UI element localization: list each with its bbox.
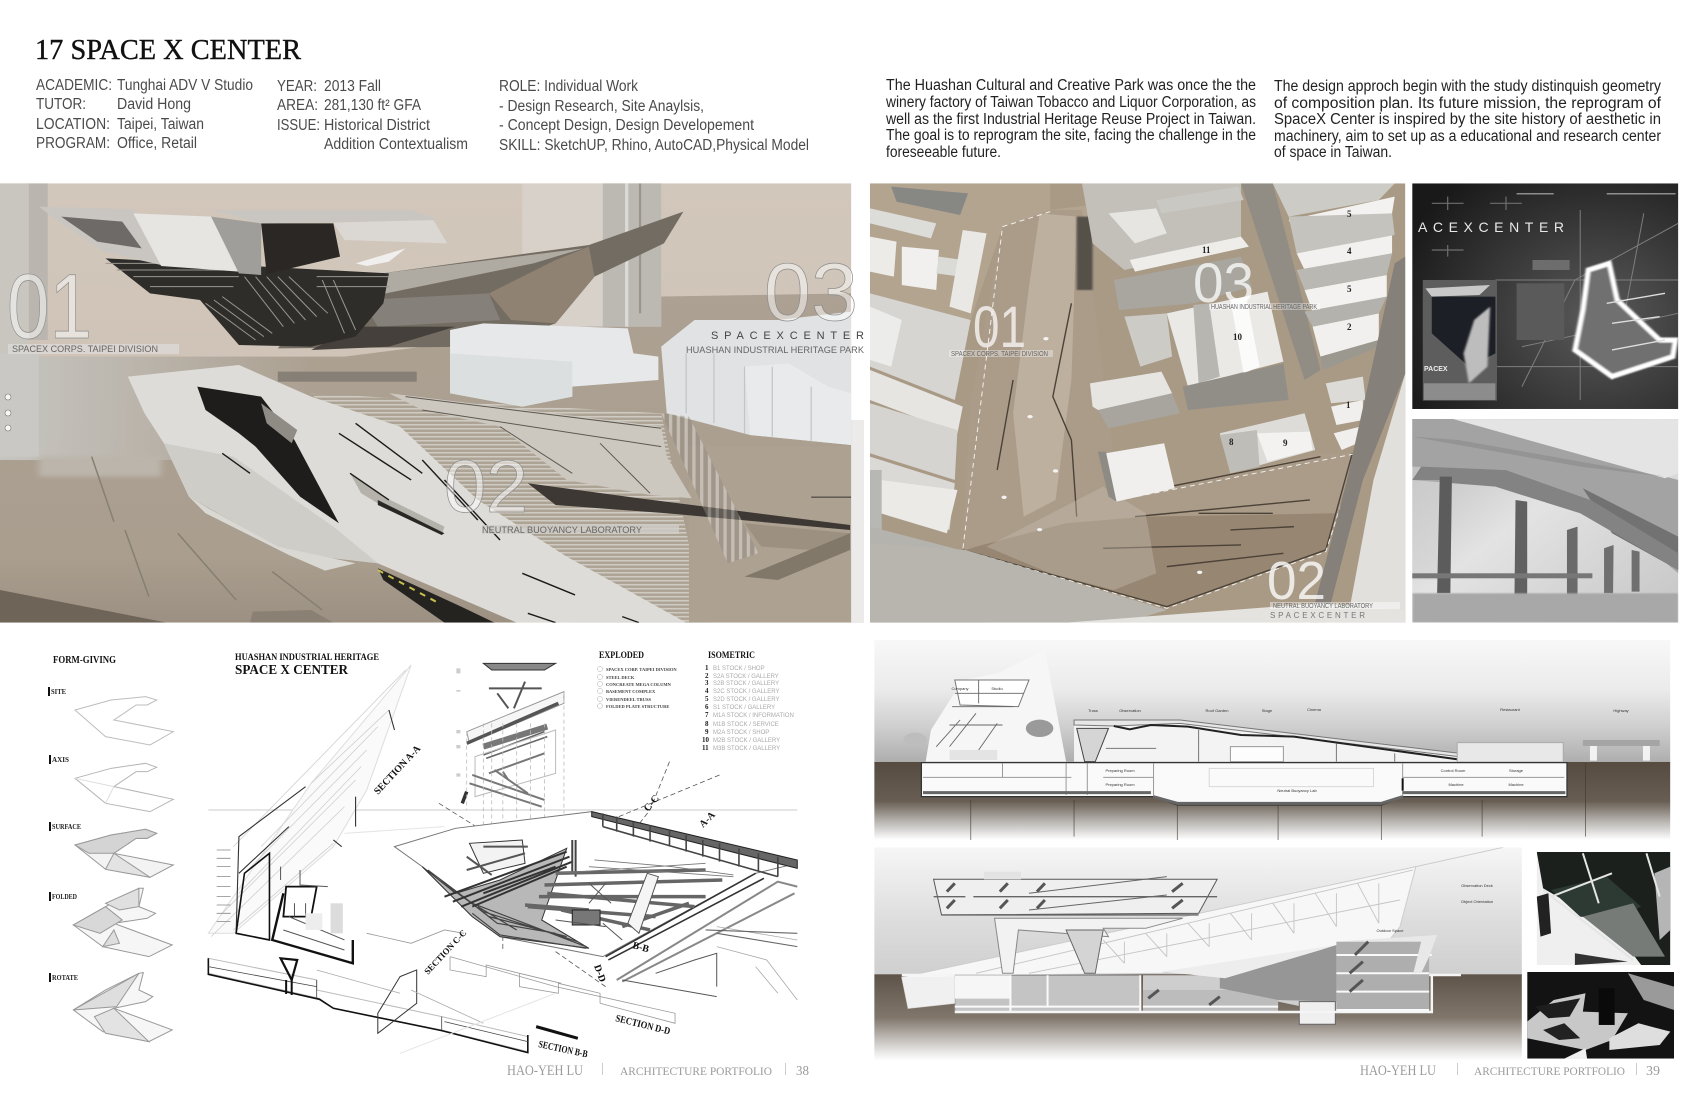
exploded legend: SPACEX CORP. TAIPEI DIVISION xyxy=(606,667,677,672)
description paragraph: site history: foreseeable future. xyxy=(886,144,1001,161)
step labels: SURFACE xyxy=(52,823,81,831)
tower wedge xyxy=(905,679,1066,762)
isometric legend: B1 STOCK / SHOP xyxy=(713,666,765,672)
numeral 02: 02 xyxy=(1267,551,1326,611)
building numbers: 5 xyxy=(1347,284,1352,294)
description paragraph: design approach: SpaceX Center is inspired by the site history of aesthetic in xyxy=(1274,111,1661,128)
exploded legend: EXPLODED xyxy=(599,650,644,660)
exploded legend xyxy=(598,650,677,709)
label: neutral buoyancy: NEUTRAL BUOYANCY LABORATORY xyxy=(482,525,642,535)
isometric legend: M2A STOCK / SHOP xyxy=(713,730,769,736)
section one room labels: Restaurant xyxy=(1500,707,1521,712)
location markers xyxy=(5,394,11,431)
description paragraph: design approach: machinery, aim to set up as a educational and research center xyxy=(1274,128,1661,145)
section one room labels: Machine xyxy=(1508,782,1524,787)
isometric legend: M1B STOCK / SERVICE xyxy=(713,722,779,728)
courtyard roofs xyxy=(469,840,525,873)
detail column: year: YEAR: xyxy=(277,78,317,95)
title: 17 SPACE X CENTER xyxy=(35,34,302,66)
exploded stack xyxy=(458,663,564,830)
ground slabs xyxy=(389,393,850,580)
diagram: folded xyxy=(73,888,172,957)
isometric legend: S1 STOCK / GALLERY xyxy=(713,705,775,711)
detail column: academic: David Hong xyxy=(117,96,191,113)
section one room labels: Observation xyxy=(1119,708,1141,713)
building numbers: 4 xyxy=(1347,246,1352,256)
exploded legend: FOLDED PLATE STRUCTURE xyxy=(606,704,669,709)
diagram: axis xyxy=(75,763,173,812)
basement xyxy=(921,763,1567,805)
central section block xyxy=(272,867,353,963)
panel: isometric drawing page xyxy=(48,650,797,1060)
panel: long section two xyxy=(874,847,1522,1061)
section tags: D-D xyxy=(591,963,608,984)
detail column: role: SKILL: SketchUP, Rhino, AutoCAD,Physical Model xyxy=(499,137,809,154)
poster artwork xyxy=(1412,183,1678,409)
detail column: year: AREA: xyxy=(277,97,318,114)
east road edge xyxy=(958,256,1406,623)
isometric legend: 10 xyxy=(702,736,710,744)
footer: right page xyxy=(1360,1063,1660,1079)
isometric legend: S2D STOCK / GALLERY xyxy=(713,697,779,703)
section two labels: Observation Deck xyxy=(1461,883,1493,888)
isometric legend xyxy=(702,650,794,752)
label: spacex corps: SPACEX CORPS. TAIPEI DIVISION xyxy=(951,351,1048,358)
detail column: year: 2013 Fall xyxy=(324,78,381,95)
foam context blocks xyxy=(450,312,851,445)
isometric legend: 4 xyxy=(705,687,709,695)
diagram: site xyxy=(75,697,173,745)
description paragraph: site history: The Huashan Cultural and Creative Park was once the the xyxy=(886,77,1256,94)
section one room labels: Storage xyxy=(1509,768,1524,773)
detail column: year: 281,130 ft² GFA xyxy=(324,97,422,114)
isometric legend: 3 xyxy=(705,679,709,687)
isometric legend: 6 xyxy=(705,703,709,711)
description paragraph: site history: The goal is to reprogram the site, facing the challenge in the xyxy=(886,127,1256,144)
step labels: FOLDED xyxy=(52,893,77,901)
description paragraph: design approach: of space in Taiwan. xyxy=(1274,144,1392,161)
site plan artwork xyxy=(870,183,1405,623)
main isometric site xyxy=(394,762,797,1000)
label: neutral buoyancy: NEUTRAL BUOYANCY LABORATORY xyxy=(1273,603,1373,610)
isometric legend: ISOMETRIC xyxy=(708,650,755,660)
isometric legend: 8 xyxy=(705,720,709,728)
footer: left page: ARCHITECTURE PORTFOLIO xyxy=(620,1064,772,1078)
section one room labels: Highway xyxy=(1613,708,1629,713)
detail column: academic: ACADEMIC: xyxy=(36,77,112,94)
section one room labels: Preparing Room xyxy=(1105,782,1135,787)
section one room labels xyxy=(951,686,1629,793)
label: spacex center: SPACEXCENTER xyxy=(1270,611,1365,620)
drawing heading: HUASHAN INDUSTRIAL HERITAGE xyxy=(235,653,379,663)
isometric legend: S2C STOCK / GALLERY xyxy=(713,689,779,695)
detail column: academic: Office, Retail xyxy=(117,135,197,152)
numeral 01: 01 xyxy=(973,295,1026,360)
building numbers: 5 xyxy=(1347,209,1352,219)
section two labels xyxy=(1377,883,1493,933)
description paragraph: design approach: The design approch begin with the study distinquish geometry xyxy=(1274,78,1661,95)
detail column: year: Addition Contextualism xyxy=(324,136,468,153)
section two artwork xyxy=(874,847,1522,1061)
upper volume dark wing xyxy=(278,212,683,350)
section tags: SECTION C-C xyxy=(422,928,468,976)
isometric legend: 2 xyxy=(705,672,709,680)
building numbers: 2 xyxy=(1347,322,1352,332)
label: huashan park: HUASHAN INDUSTRIAL HERITAGE PARK xyxy=(1211,304,1317,311)
step labels: ROTATE xyxy=(52,974,78,982)
isometric legend: 11 xyxy=(702,744,709,752)
photo: model shadow study xyxy=(1527,972,1674,1059)
sloping roof building xyxy=(1074,720,1660,762)
section tags: B-B xyxy=(631,940,650,955)
panel: long section one xyxy=(874,640,1670,840)
numeral 01: 01 xyxy=(7,256,92,358)
detail column: academic xyxy=(36,77,253,152)
building numbers: 8 xyxy=(1229,437,1234,447)
folded wedge xyxy=(422,848,589,948)
diagram: surface xyxy=(75,829,173,877)
description paragraph: site history: winery factory of Taiwan Tobacco and Liquor Corporation, as xyxy=(885,94,1256,111)
description paragraph: design approach: of composition plan. Its future mission, the reprogram of xyxy=(1274,95,1662,112)
exploded legend: CONCREATE MEGA COLUMN xyxy=(606,682,672,687)
foundation piles xyxy=(971,763,1586,840)
glowing site outline xyxy=(1575,263,1676,377)
numeral 03: 03 xyxy=(1193,251,1254,314)
building numbers xyxy=(1202,209,1352,448)
detail column: role: - Design Research, Site Anaylsis, xyxy=(499,98,704,115)
building numbers: 10 xyxy=(1233,332,1242,342)
detail column: year xyxy=(277,78,468,153)
detail column: year: Historical District xyxy=(324,117,431,134)
detail column: year: ISSUE: xyxy=(277,117,320,134)
form-giving diagrams xyxy=(73,697,173,1042)
isometric drawing xyxy=(208,663,797,1053)
section tags: C-C xyxy=(642,793,662,814)
poster inset xyxy=(1423,280,1497,401)
lower chambers xyxy=(902,935,1461,1024)
panel: interior photo xyxy=(1412,419,1678,623)
isometric legend: S2B STOCK / GALLERY xyxy=(713,681,779,687)
section tags: SECTION D-D xyxy=(614,1013,671,1037)
isometric legend: 1 xyxy=(705,664,709,672)
section one room labels: Control Room xyxy=(1441,768,1466,773)
detail column: role: - Concept Design, Design Developement xyxy=(499,117,755,134)
detail column: academic: LOCATION: xyxy=(36,116,110,133)
section b-b long drawing xyxy=(208,958,578,1053)
section tags: SECTION A-A xyxy=(372,743,424,797)
section one room labels: Cinema xyxy=(1307,707,1322,712)
diagram: rotate xyxy=(73,973,172,1042)
building numbers: 1 xyxy=(1346,400,1351,410)
detail column: academic: Taipei, Taiwan xyxy=(117,116,204,133)
upper office bar xyxy=(934,872,1217,973)
footer: left page xyxy=(507,1063,809,1079)
isometric legend: 9 xyxy=(705,728,709,736)
building numbers: 9 xyxy=(1283,438,1288,448)
drawing heading xyxy=(235,653,379,678)
detail column: role: ROLE: Individual Work xyxy=(499,78,638,95)
isometric legend: M1A STOCK / INFORMATION xyxy=(713,713,794,719)
site markers xyxy=(1001,337,1202,574)
numeral 03: 03 xyxy=(764,247,858,338)
model photo artwork xyxy=(0,183,851,623)
existing buildings xyxy=(1082,183,1395,502)
description paragraph: site history: well as the first Industrial Heritage Reuse Project in Taiwan. xyxy=(885,111,1256,128)
detail column: role xyxy=(499,78,809,154)
footer: right page: HAO-YEH LU xyxy=(1360,1063,1436,1079)
drawing heading: SPACE X CENTER xyxy=(235,663,349,678)
section a-a wedge xyxy=(208,665,411,940)
section one room labels: Studio xyxy=(991,686,1003,691)
section two labels: Object Orientation xyxy=(1461,899,1493,904)
footer: right page: 39 xyxy=(1646,1064,1660,1079)
truss ramp xyxy=(902,847,1503,1008)
exploded legend: VIERENDEEL TRUSS xyxy=(606,697,652,702)
form-giving heading: FORM-GIVING xyxy=(53,655,116,666)
poster heading: ACEXCENTER xyxy=(1418,219,1564,235)
isometric legend: M2B STOCK / GALLERY xyxy=(713,738,780,744)
neighbouring buildings xyxy=(870,184,1088,550)
building numbers: 11 xyxy=(1202,245,1211,255)
section tags xyxy=(372,743,718,1060)
label: huashan park: HUASHAN INDUSTRIAL HERITAGE PARK xyxy=(686,345,864,355)
excavated site ground xyxy=(963,210,1358,608)
isometric legend: S2A STOCK / GALLERY xyxy=(713,674,779,680)
section one room labels: Machine xyxy=(1448,782,1464,787)
panel: site plan xyxy=(870,183,1405,623)
poster inset label: PACEX xyxy=(1424,366,1448,373)
footer: left page: HAO-YEH LU xyxy=(507,1063,583,1079)
label: spacex center: SPACEXCENTER xyxy=(711,330,864,342)
upper volume roof xyxy=(39,207,447,275)
section one room labels: Stage xyxy=(1262,708,1273,713)
step labels xyxy=(48,687,81,982)
footer: right page: ARCHITECTURE PORTFOLIO xyxy=(1474,1064,1625,1078)
section tags: A-A xyxy=(697,809,718,830)
section one room labels: Roof Garden xyxy=(1206,708,1228,713)
section two labels: Outdoor Space xyxy=(1377,928,1404,933)
label: spacex corps: SPACEX CORPS. TAIPEI DIVISION xyxy=(12,344,158,354)
section one room labels: Truss xyxy=(1088,708,1098,713)
detail column: academic: TUTOR: xyxy=(36,96,86,113)
section tags: SECTION B-B xyxy=(537,1039,589,1060)
exploded legend: BASEMENT COMPLEX xyxy=(606,689,656,694)
lower white volume xyxy=(92,365,686,623)
isometric legend: 5 xyxy=(705,695,709,703)
detail column: academic: Tunghai ADV V Studio xyxy=(117,77,253,94)
description paragraph: site history xyxy=(885,77,1256,161)
panel: dark poster xyxy=(1412,183,1678,409)
section one room labels: Neutral Buoyancy Lab xyxy=(1277,788,1317,793)
description paragraph: design approach xyxy=(1274,78,1662,161)
isometric legend: 7 xyxy=(705,711,709,719)
upper volume stacked floors xyxy=(106,258,389,347)
exploded legend: STEEL DECK xyxy=(606,675,635,680)
photo: underside of structure xyxy=(1537,852,1670,965)
section one room labels: Preparing Room xyxy=(1105,768,1135,773)
panel: hero model photo xyxy=(0,183,864,623)
step labels: SITE xyxy=(51,688,66,696)
numeral 02: 02 xyxy=(444,445,528,528)
footer: left page: 38 xyxy=(796,1064,809,1079)
section d-d long drawing xyxy=(344,827,675,1053)
isometric legend: M3B STOCK / GALLERY xyxy=(713,746,780,752)
project details xyxy=(36,77,809,154)
detail column: academic: PROGRAM: xyxy=(36,135,110,152)
step labels: AXIS xyxy=(52,756,69,764)
section one room labels: Company xyxy=(951,686,969,691)
